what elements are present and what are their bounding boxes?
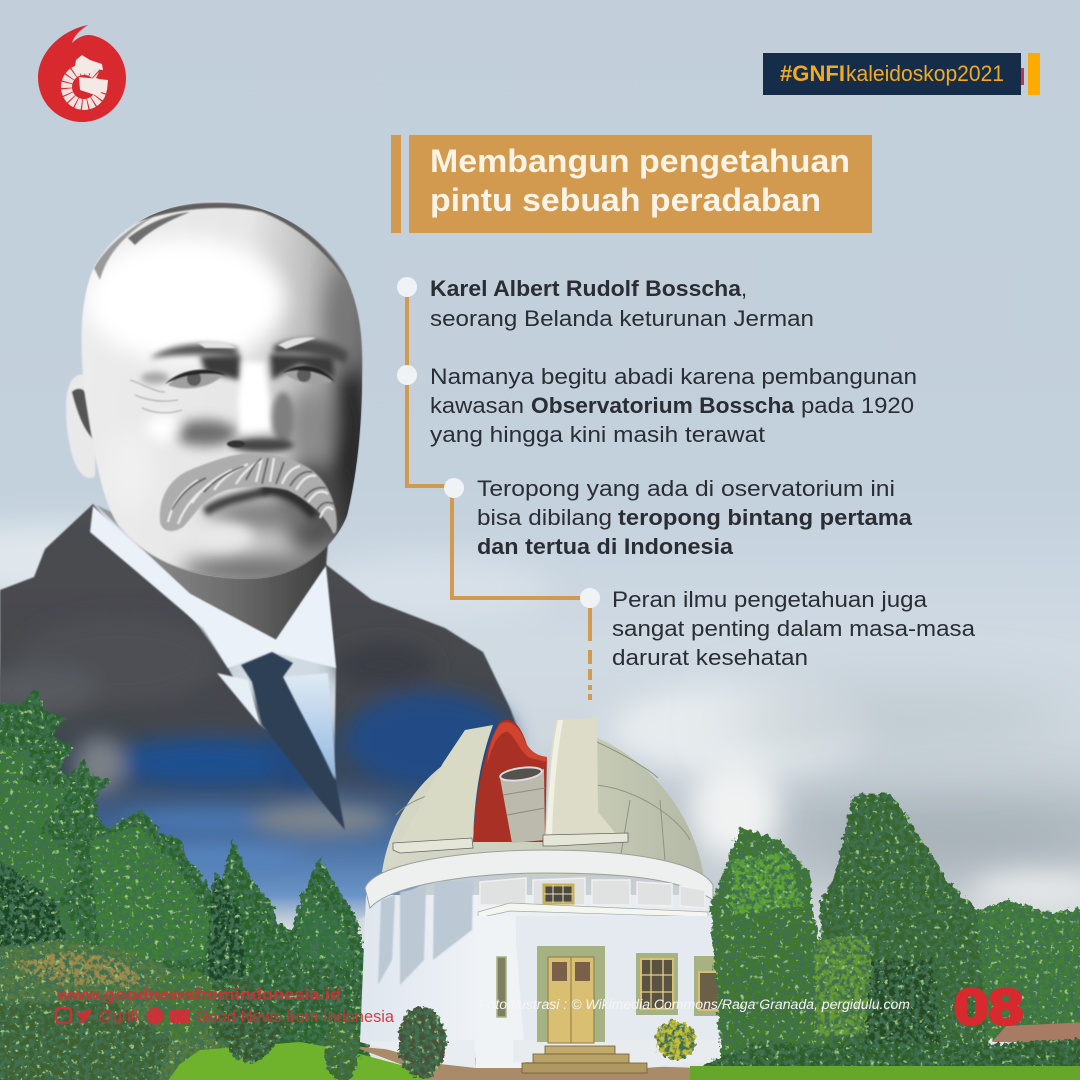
door frame	[537, 946, 605, 1042]
portrait head	[82, 202, 362, 578]
dome left shutter	[398, 725, 493, 846]
text: teropong bintang	[477, 476, 913, 559]
window far right	[694, 956, 744, 1016]
drum shadows	[378, 880, 473, 985]
footer website and social: www.goodnewsfromindonesia.id	[56, 985, 341, 1004]
upper window	[544, 885, 573, 903]
text: peran ilmu pengetahuan: sangat penting dalam masa-masa	[612, 616, 976, 641]
portrait necktie	[241, 652, 345, 830]
lawn bushes	[222, 998, 278, 1062]
text: peran ilmu pengetahuan: darurat kesehatan	[612, 645, 808, 670]
portrait neck	[96, 505, 330, 640]
text: Karel Albert Rudolf Bosscha: Karel Albert Rudolf Bosscha	[430, 276, 742, 301]
drum ring	[365, 850, 713, 908]
observatory dome	[382, 738, 704, 878]
dome red slot	[473, 720, 547, 842]
portrait collar	[90, 506, 336, 668]
portrait moustache	[160, 453, 337, 534]
dome ledges	[393, 833, 628, 853]
portrait shirt lower panels	[217, 673, 260, 725]
side window	[497, 957, 506, 1017]
hashtag badge	[763, 53, 1040, 95]
social icons	[56, 1008, 190, 1024]
roof at right	[992, 1022, 1080, 1042]
left shrubs	[0, 940, 370, 1080]
telescope	[499, 765, 545, 843]
portrait eyebrows	[150, 339, 348, 364]
text: teropong bintang: bisa dibilang	[477, 505, 612, 530]
title block: pintu sebuah peradaban	[430, 182, 821, 218]
portrait wrinkles	[130, 380, 182, 413]
portrait face shading	[85, 203, 370, 584]
yellow flower bush	[656, 1020, 696, 1060]
text: peran ilmu pengetahuan: Peran ilmu pengetahuan juga	[612, 587, 928, 612]
drum upper frieze	[480, 878, 705, 908]
footer website and social: @gnfi	[98, 1008, 138, 1025]
text: Observatorium Bosscha	[430, 364, 917, 447]
text: Observatorium Bosscha: yang hingga kini masih terawat	[430, 422, 765, 447]
text: Observatorium Bosscha: kawasan	[430, 393, 524, 418]
path	[352, 1046, 700, 1080]
right trees	[710, 793, 1080, 1075]
timeline nodes	[397, 277, 600, 608]
footer website and social: Good News from Indonesia	[196, 1007, 395, 1026]
observatory building	[360, 718, 748, 1073]
page number: 08	[954, 979, 1023, 1035]
title block: Membangun pengetahuan	[430, 143, 850, 179]
drum wall	[360, 895, 748, 1068]
timeline connector	[407, 287, 590, 700]
small plants by the wall	[325, 1006, 446, 1080]
text: Karel Albert Rudolf Bosscha: seorang Belanda keturunan Jerman	[430, 306, 814, 331]
text: Observatorium Bosscha: Namanya begitu abadi karena pembangunan	[430, 364, 917, 389]
portrait eye sockets	[141, 354, 335, 384]
dome right shutter	[545, 718, 617, 838]
text: Observatorium Bosscha: Observatorium Bosscha	[531, 393, 795, 418]
text: Karel Albert Rudolf Bosscha	[430, 276, 814, 331]
window right	[636, 953, 678, 1015]
hashtag badge: kaleidoskop2021	[846, 61, 1004, 86]
portrait blue tint patches	[0, 616, 515, 872]
foreground shrubs and lawn	[690, 1022, 1080, 1080]
dome panel lines	[396, 742, 690, 860]
portrait eyebrow highlights	[198, 337, 316, 349]
portrait suit fading to sky	[0, 504, 528, 930]
porch	[360, 903, 738, 1068]
portrait eyes	[165, 366, 335, 388]
text: Karel Albert Rudolf Bosscha: ,	[741, 276, 747, 301]
portrait ear	[66, 375, 97, 478]
text: teropong bintang: teropong bintang pertama	[618, 505, 913, 530]
logo: GNFI	[38, 25, 126, 122]
lawn left	[165, 1042, 440, 1080]
hashtag badge: #GNFI	[780, 61, 845, 86]
text: teropong bintang: Teropong yang ada di oservatorium ini	[477, 476, 895, 501]
red slot highlight	[487, 722, 547, 765]
portrait hair line	[94, 203, 347, 282]
text: peran ilmu pengetahuan	[612, 587, 976, 670]
text: Observatorium Bosscha: pada 1920	[801, 393, 914, 418]
footer website and social	[56, 985, 395, 1026]
title block	[391, 135, 872, 233]
door	[548, 957, 594, 1043]
portrait: Karel Albert Rudolf Bosscha	[0, 202, 528, 930]
steps	[522, 1046, 647, 1073]
photo credit: Foto/Ilustrasi : © Wikimedia Commons/Raga Granada, pergidulu.com	[479, 997, 910, 1012]
portrait nose	[227, 362, 294, 452]
left trees	[0, 687, 372, 1080]
text: teropong bintang: dan tertua di Indonesia	[477, 534, 734, 559]
